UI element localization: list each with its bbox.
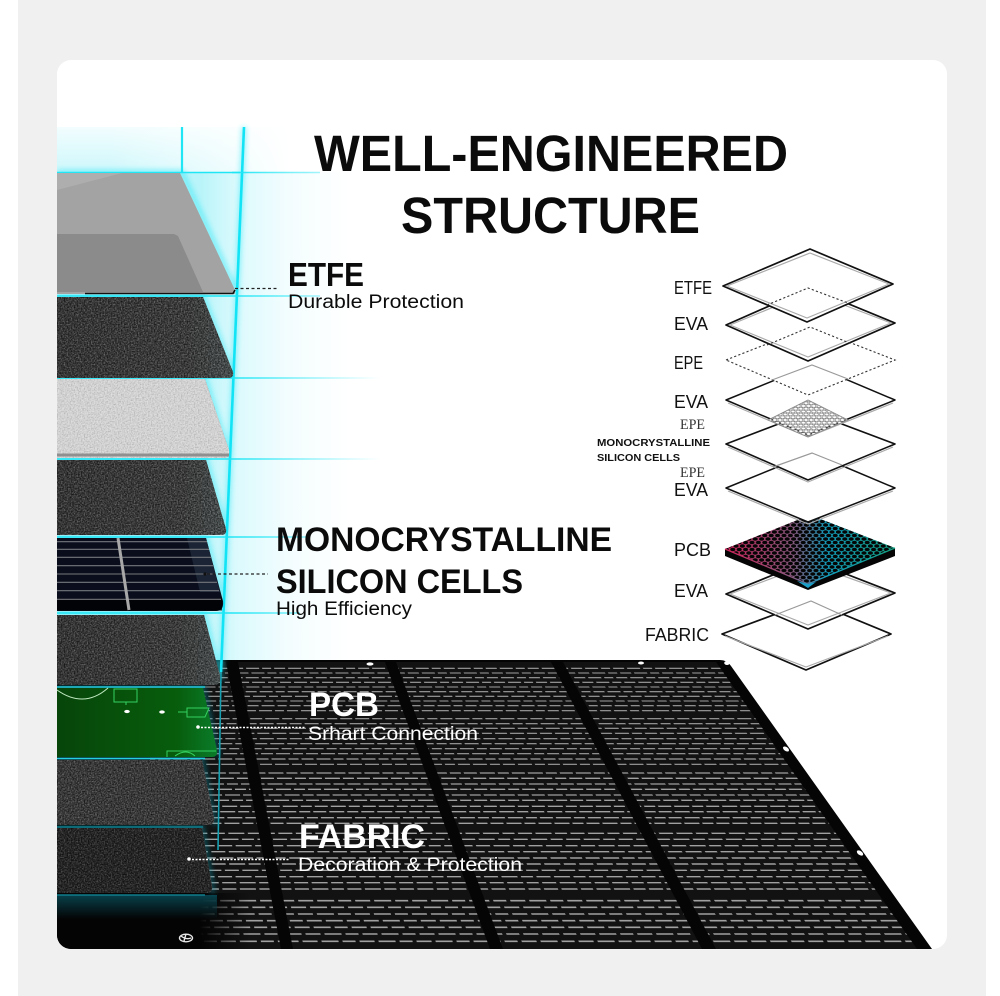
layer: ETFE film: [57, 173, 235, 294]
see-through sheet edges: [767, 288, 852, 615]
callout: PCB: PCB: [309, 686, 379, 724]
layer: EVA foam 1: [57, 297, 233, 378]
sheet: PCB: [725, 515, 895, 590]
layer: fabric: [57, 828, 212, 893]
layer: EVA foam 4: [57, 760, 214, 825]
title: WELL-ENGINEERED: [314, 125, 788, 182]
sheet: fabric: [722, 601, 891, 670]
callout: monocrystalline silicon cells: MONOCRYSTALLINE: [276, 521, 612, 559]
callout: monocrystalline silicon cells: High Efficiency: [276, 599, 413, 620]
diagram labels: SILICON CELLS: [597, 452, 680, 464]
diagram labels: EVA: [674, 392, 708, 412]
exploded layer diagram: [722, 249, 895, 670]
callout: ETFE: ETFE: [288, 256, 364, 293]
sheet: EVA 4: [726, 453, 895, 524]
diagram labels: PCB: [674, 540, 711, 560]
sheet: EVA 3: [726, 412, 895, 482]
title: STRUCTURE: [401, 187, 700, 244]
diagram labels: EPE: [674, 353, 703, 373]
sheet: EPE dashed: [726, 327, 895, 395]
diagram labels: MONOCRYSTALLINE: [597, 437, 710, 449]
diagram labels: EPE: [680, 417, 705, 433]
callout: monocrystalline silicon cells: SILICON CELLS: [276, 563, 523, 601]
eyelets: [366, 662, 374, 666]
diagram labels: EVA: [674, 581, 708, 601]
diagram labels: EVA: [674, 314, 708, 334]
diagram labels: EPE: [680, 465, 705, 481]
logo mark: [180, 934, 192, 942]
cyan grid lines: [57, 127, 380, 895]
sheet: EVA 1: [726, 288, 895, 361]
diagram labels: ETFE: [674, 278, 712, 298]
white card: [57, 60, 947, 949]
solar panel: [57, 660, 932, 949]
sheet: EVA 2: [726, 365, 895, 437]
callout: fabric: FABRIC: [299, 818, 425, 856]
left visual: exploded layers over solar panel: [57, 124, 932, 949]
callout: fabric: [187, 818, 522, 876]
callout: PCB: Srhart Connection: [308, 724, 478, 745]
callout: PCB: [196, 686, 478, 745]
layer: EVA foam 2: [57, 460, 226, 535]
sheet: EVA 5: [726, 560, 895, 629]
cyan glow lines: [57, 127, 244, 893]
callout: monocrystalline silicon cells: [203, 521, 612, 620]
callout: ETFE: [235, 256, 464, 313]
callout: ETFE: Durable Protection: [288, 292, 464, 313]
title: [314, 125, 788, 244]
cyan glow backdrop: [57, 127, 306, 660]
sheet: ETFE: [723, 249, 893, 322]
callout: fabric: Decoration & Protection: [298, 855, 522, 876]
dark fade under the stack: [57, 893, 250, 949]
diagram labels: EVA: [674, 480, 708, 500]
sheet: silicon cell mesh: [768, 400, 848, 437]
diagram labels: [597, 278, 712, 645]
layer: monocrystalline silicon cells: [57, 538, 223, 611]
layer: PCB green board: [57, 688, 217, 757]
layer: EVA foam 3: [57, 615, 220, 685]
diagram labels: FABRIC: [645, 625, 709, 645]
layer: EPE white foam: [57, 379, 229, 458]
